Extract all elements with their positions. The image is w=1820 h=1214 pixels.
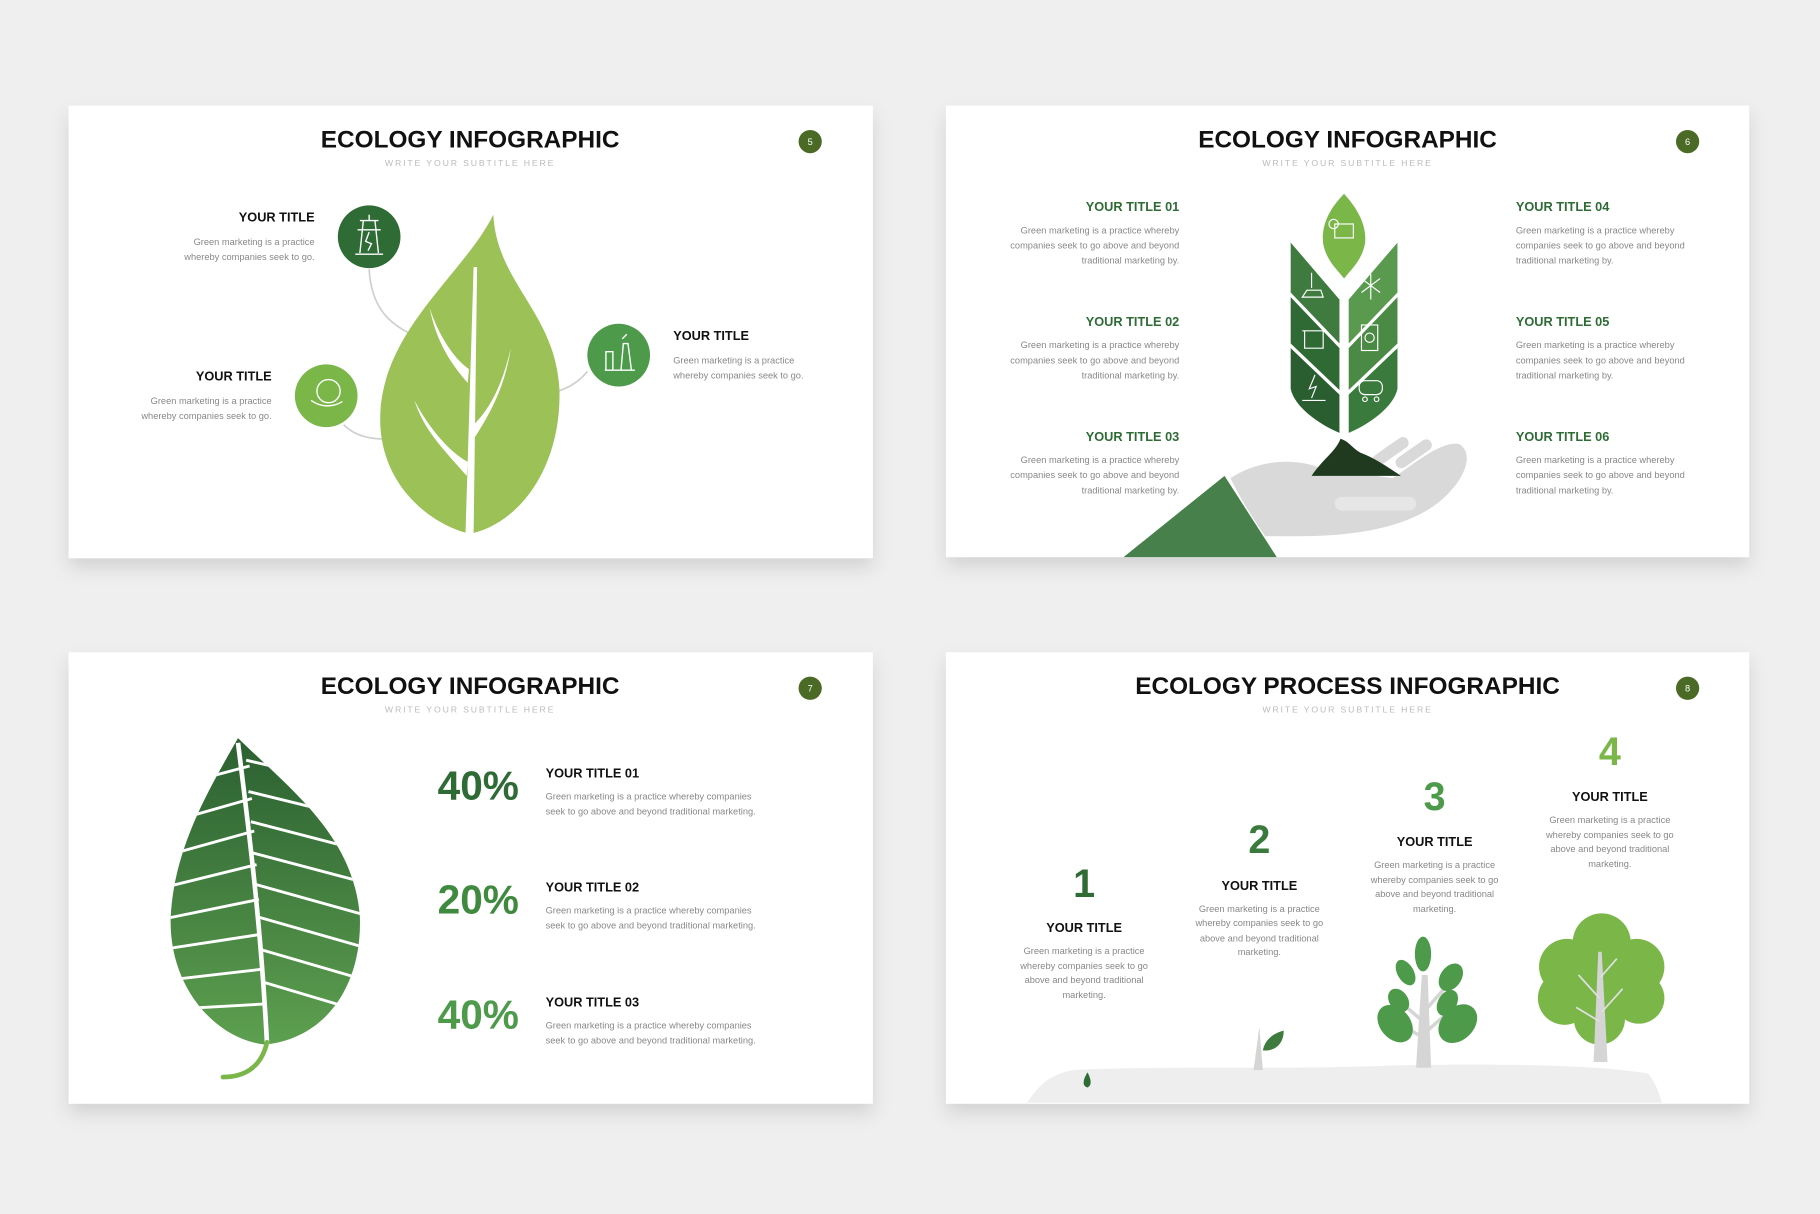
step 3: above and beyond traditional (1375, 889, 1494, 899)
stat 40%: seek to go above and beyond traditional marketing. (546, 807, 756, 817)
step 3: 3 (1424, 775, 1446, 819)
page number badge: 5 (808, 137, 813, 147)
panel: striped leaf percentages 7 (69, 652, 873, 1104)
ground (1027, 1065, 1662, 1103)
icon circle: globe in hand (295, 364, 358, 427)
subtitle: WRITE YOUR SUBTITLE HERE (1262, 705, 1433, 715)
panel: plant in hand 6 (946, 106, 1749, 557)
text block: title 2: YOUR TITLE (196, 369, 272, 384)
young plant (1370, 937, 1485, 1068)
page number badge: 7 (808, 684, 813, 694)
step 1: YOUR TITLE (1046, 920, 1122, 935)
stat 40% bottom: seek to go above and beyond traditional marketing. (546, 1035, 756, 1045)
title: ECOLOGY INFOGRAPHIC (1198, 126, 1497, 153)
step 4: 4 (1599, 730, 1621, 774)
stat 20%: seek to go above and beyond traditional marketing. (546, 920, 756, 930)
subtitle: WRITE YOUR SUBTITLE HERE (1262, 158, 1433, 168)
text block: title 2: whereby companies seek to go. (140, 411, 272, 421)
connector lines (344, 269, 587, 439)
text block: title 04: YOUR TITLE 04 (1516, 199, 1610, 214)
text block: title 05: Green marketing is a practice whereby (1516, 340, 1675, 350)
text block: title 05: companies seek to go above and beyond (1516, 355, 1685, 365)
text block: title 01: traditional marketing by. (1082, 255, 1179, 265)
step 1: whereby companies seek to go (1019, 961, 1148, 971)
text block: title 05: traditional marketing by. (1516, 370, 1614, 380)
text block: title 06: traditional marketing by. (1516, 485, 1614, 495)
text block: title 01: Green marketing is a practice whereby (1021, 225, 1180, 235)
sprout (1254, 1027, 1284, 1070)
step 1: above and beyond traditional (1025, 975, 1144, 985)
step 4: Green marketing is a practice (1549, 815, 1670, 825)
stat 20%: YOUR TITLE 02 (546, 879, 639, 894)
stat 20%: Green marketing is a practice whereby companies (546, 905, 752, 915)
icon circle: power tower (338, 205, 400, 268)
stat 20%: 20% (438, 876, 519, 922)
step 1: Green marketing is a practice (1024, 946, 1145, 956)
leaf (380, 215, 560, 534)
text block: title 2: Green marketing is a practice (151, 396, 272, 406)
title: ECOLOGY INFOGRAPHIC (321, 126, 619, 153)
subtitle: WRITE YOUR SUBTITLE HERE (385, 158, 555, 168)
stat 40%: Green marketing is a practice whereby companies (546, 792, 752, 802)
page number badge (1676, 130, 1699, 153)
icon circle: factory (587, 324, 650, 386)
step 4: marketing. (1588, 859, 1631, 869)
text block: title 06: Green marketing is a practice whereby (1516, 455, 1675, 465)
stat 40% bottom: 40% (438, 991, 519, 1037)
stat 40% (438, 763, 756, 817)
step 2: Green marketing is a practice (1199, 904, 1320, 914)
seed (1084, 1072, 1091, 1087)
step 1 (1019, 862, 1148, 1000)
text block: title 04: companies seek to go above and beyond (1516, 240, 1685, 250)
text block: title 3: YOUR TITLE (673, 328, 749, 343)
text block: title 02 (1010, 314, 1180, 380)
step 2: whereby companies seek to go (1194, 918, 1323, 928)
step 4: whereby companies seek to go (1545, 830, 1674, 840)
step 3: Green marketing is a practice (1374, 860, 1495, 870)
text block: title 06 (1516, 429, 1685, 495)
text block: title 03 (1010, 429, 1180, 495)
soil (1312, 439, 1401, 476)
step 2: YOUR TITLE (1221, 878, 1297, 893)
text block: title 2 (140, 369, 272, 421)
title: ECOLOGY INFOGRAPHIC (321, 673, 619, 700)
text block: title 01: companies seek to go above and beyond (1010, 240, 1179, 250)
arm (1124, 476, 1277, 557)
text block: title 02: companies seek to go above and beyond (1010, 355, 1179, 365)
text block: title 02: Green marketing is a practice whereby (1021, 340, 1180, 350)
text block: title 03: companies seek to go above and beyond (1010, 470, 1179, 480)
text block: title 03: YOUR TITLE 03 (1086, 429, 1179, 444)
step 2: 2 (1248, 818, 1270, 862)
text block: title 05: YOUR TITLE 05 (1516, 314, 1609, 329)
page number badge: 6 (1685, 137, 1690, 147)
text block: title 04: traditional marketing by. (1516, 255, 1614, 265)
step 2 (1194, 818, 1323, 957)
text block: title 3: whereby companies seek to go. (672, 370, 804, 380)
step 3: marketing. (1413, 904, 1456, 914)
step 3 (1370, 775, 1498, 914)
subtitle: WRITE YOUR SUBTITLE HERE (385, 705, 555, 715)
step 1: 1 (1073, 862, 1095, 906)
stat 40%: YOUR TITLE 01 (546, 766, 639, 781)
title: ECOLOGY PROCESS INFOGRAPHIC (1135, 673, 1560, 700)
step 4: YOUR TITLE (1572, 789, 1648, 804)
text block: title 03: Green marketing is a practice whereby (1021, 455, 1180, 465)
stat 40%: 40% (438, 763, 519, 809)
text block: title 03: traditional marketing by. (1082, 485, 1179, 495)
text block: title 3 (672, 328, 804, 380)
text block: title 02: traditional marketing by. (1082, 370, 1179, 380)
step 4: above and beyond traditional (1550, 844, 1669, 854)
text block: title 02: YOUR TITLE 02 (1086, 314, 1179, 329)
text block: title 1: whereby companies seek to go. (183, 252, 315, 262)
striped leaf (170, 738, 360, 1080)
panel: leaf infographic 5 (69, 106, 873, 558)
panel: process growth 8 (946, 652, 1749, 1104)
text block: title 1: Green marketing is a practice (194, 237, 315, 247)
text block: title 1 (183, 210, 315, 262)
text block: title 05 (1516, 314, 1685, 380)
stat 40% bottom (438, 991, 756, 1045)
step 2: marketing. (1238, 947, 1281, 957)
page number badge (799, 677, 822, 700)
text block: title 01 (1010, 199, 1180, 265)
text block: title 06: YOUR TITLE 06 (1516, 429, 1609, 444)
text block: title 04: Green marketing is a practice whereby (1516, 225, 1675, 235)
hand (1230, 435, 1467, 536)
step 3: YOUR TITLE (1397, 834, 1472, 849)
step 2: above and beyond traditional (1200, 933, 1319, 943)
page number badge (799, 130, 822, 153)
text block: title 1: YOUR TITLE (239, 210, 315, 225)
text block: title 3: Green marketing is a practice (673, 355, 794, 365)
text block: title 04 (1516, 199, 1685, 265)
stat 20% (438, 876, 756, 930)
plant with icon leaves (1291, 194, 1397, 433)
stat 40% bottom: YOUR TITLE 03 (546, 994, 639, 1009)
step 4 (1545, 730, 1674, 869)
page number badge (1676, 677, 1699, 700)
page number badge: 8 (1685, 684, 1690, 694)
text block: title 01: YOUR TITLE 01 (1086, 199, 1179, 214)
text block: title 06: companies seek to go above and beyond (1516, 470, 1685, 480)
step 3: whereby companies seek to go (1370, 875, 1498, 885)
tree (1538, 913, 1664, 1062)
stat 40% bottom: Green marketing is a practice whereby companies (546, 1020, 752, 1030)
step 1: marketing. (1062, 990, 1106, 1000)
